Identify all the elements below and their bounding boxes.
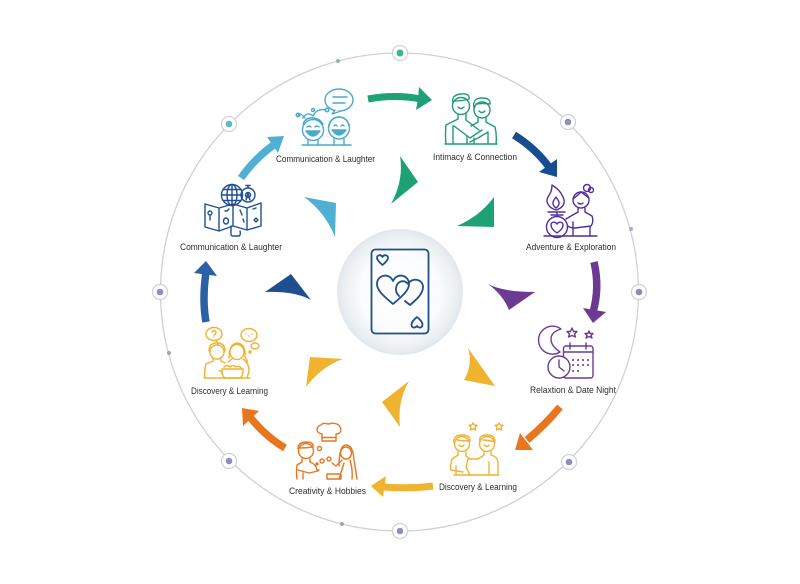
step: discovery and learning, left xyxy=(191,328,268,397)
inner pointer: yellow bottom xyxy=(382,381,409,427)
step: discovery and learning, lower right xyxy=(439,423,517,493)
label: Discovery & Learning xyxy=(439,482,517,493)
inner pointer: green one xyxy=(391,156,418,204)
arrow: navy, intimacy to adventure xyxy=(514,135,557,177)
icon: two men reading with stars xyxy=(451,423,503,475)
step: communication and laughter, top xyxy=(276,89,375,165)
label: Discovery & Learning xyxy=(191,386,268,397)
node: lower left xyxy=(222,454,236,468)
step: adventure and exploration xyxy=(526,184,616,253)
inner pointer: light blue xyxy=(304,197,336,237)
icon: moon, stars, calendar and clock xyxy=(539,326,593,378)
label: Communication & Laughter xyxy=(180,242,282,253)
center hub with card icon xyxy=(337,229,463,355)
arrow: orange, creativity to discovery xyxy=(242,408,285,448)
step: intimacy and connection xyxy=(433,94,517,163)
icon: couple cooking with chef hat xyxy=(296,423,357,479)
node: top xyxy=(392,46,408,60)
icon: map, globe and compass xyxy=(205,184,261,236)
arrow: purple, adventure to relaxation xyxy=(583,262,606,323)
node: upper left xyxy=(222,116,236,132)
inner pointer: yellow left xyxy=(306,357,343,387)
icon: laughing jesters with speech bubble xyxy=(296,89,353,145)
arrow: blue, discovery to communication xyxy=(194,261,217,322)
node: lower right xyxy=(562,454,576,470)
icon: playing card with hearts xyxy=(372,250,428,334)
icon: couple with speech bubbles and pot xyxy=(204,328,259,378)
label: Intimacy & Connection xyxy=(433,152,517,163)
step: communication and laughter, left xyxy=(180,184,282,253)
inner pointer: green two xyxy=(457,197,494,227)
arrow: light blue, communication to laughter xyxy=(241,136,284,178)
label: Adventure & Exploration xyxy=(526,242,616,253)
inner pointer: purple xyxy=(488,284,535,310)
icon: two men embracing xyxy=(445,94,497,144)
node: bottom xyxy=(392,524,408,538)
arrow: green, laughter to intimacy xyxy=(368,87,432,110)
icon: girl with flame and heart wheel xyxy=(544,184,597,238)
node: left xyxy=(152,284,168,300)
step: creativity and hobbies xyxy=(289,423,366,497)
arrow: orange, relaxation to discovery xyxy=(515,407,560,450)
inner pointer: navy xyxy=(265,274,311,300)
outer ring with nodes xyxy=(152,46,646,538)
label: Communication & Laughter xyxy=(276,154,375,165)
label: Creativity & Hobbies xyxy=(289,486,366,497)
step: relaxation and date night xyxy=(530,326,616,396)
node: upper right xyxy=(560,114,576,130)
arrow: yellow, discovery to creativity xyxy=(371,476,433,497)
node: right xyxy=(632,284,646,300)
label: Relaxtion & Date Night xyxy=(530,385,616,396)
inner pointer: yellow right xyxy=(464,348,495,386)
